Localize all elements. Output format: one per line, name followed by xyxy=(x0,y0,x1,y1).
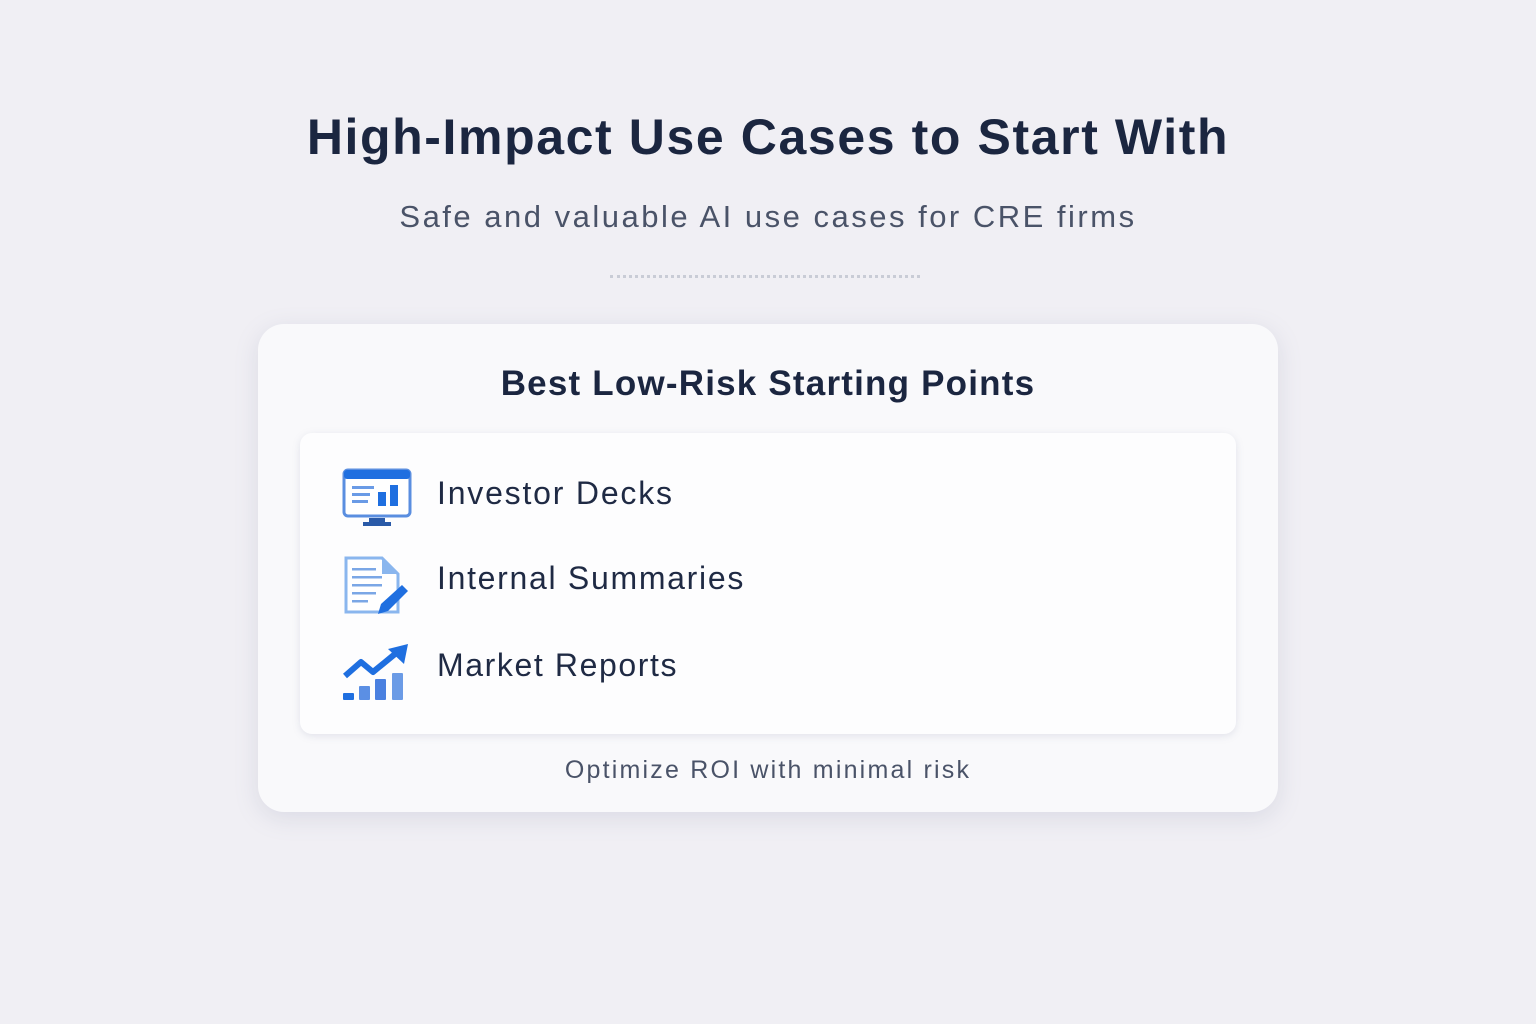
label: Investor Decks xyxy=(437,475,674,511)
item: internal summaries xyxy=(344,556,745,614)
dotted divider xyxy=(610,275,920,278)
panel: starting points xyxy=(258,324,1278,812)
label: Internal Summaries xyxy=(437,560,745,596)
panel heading: Best Low-Risk Starting Points xyxy=(501,364,1035,403)
list card xyxy=(300,433,1236,734)
icon: growth chart xyxy=(343,644,408,700)
footer note: Optimize ROI with minimal risk xyxy=(565,756,971,784)
title: High-Impact Use Cases to Start With xyxy=(307,109,1229,165)
icon: document pen xyxy=(344,556,408,614)
icon: monitor xyxy=(342,468,412,526)
item: investor decks xyxy=(342,468,674,526)
item: market reports xyxy=(343,644,678,700)
subtitle: Safe and valuable AI use cases for CRE firms xyxy=(399,199,1137,234)
label: Market Reports xyxy=(437,647,678,683)
